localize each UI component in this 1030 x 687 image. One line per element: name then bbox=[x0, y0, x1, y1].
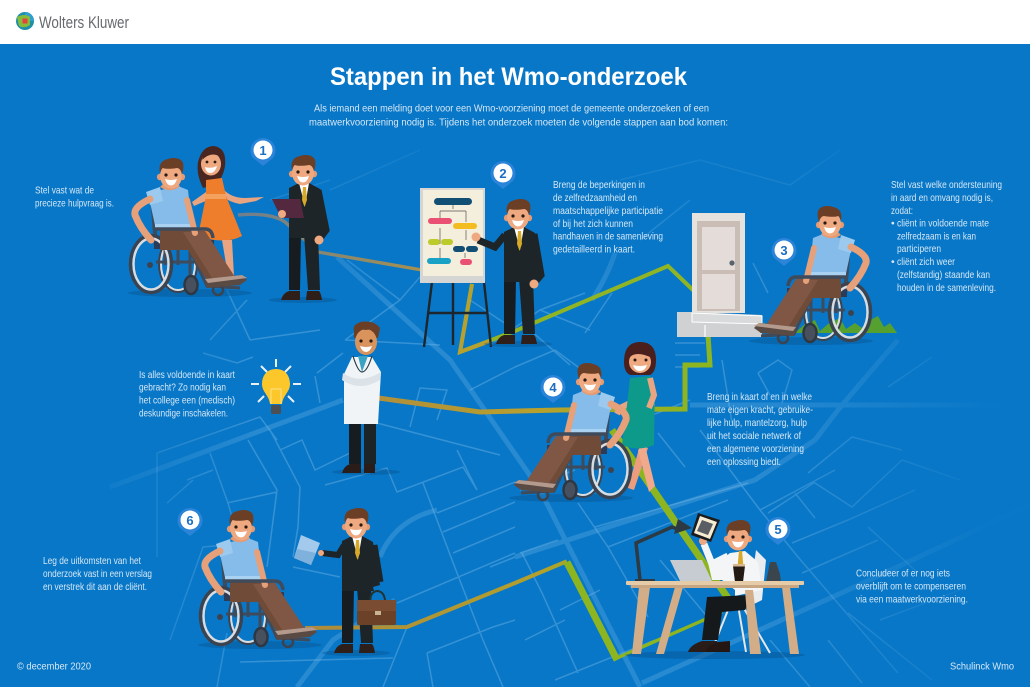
step 4 text bbox=[707, 392, 813, 468]
figure: woman in green dress bbox=[617, 342, 656, 492]
desk lamp bbox=[636, 527, 680, 580]
pin: step 1 bbox=[251, 138, 276, 166]
pin: step 5 bbox=[766, 517, 790, 545]
flipchart on easel bbox=[420, 188, 491, 347]
pin: step 6 bbox=[178, 508, 203, 536]
intro text bbox=[309, 104, 728, 128]
route line: gold section by easel bbox=[460, 284, 490, 352]
step 6 text bbox=[43, 556, 152, 593]
figure: man in wheelchair, step 1 bbox=[128, 158, 252, 297]
step 3 text: • bbox=[891, 218, 895, 230]
step 3 text: • bbox=[891, 257, 895, 268]
expert text bbox=[139, 370, 235, 420]
step 6 text: Leg de uitkomsten van het bbox=[43, 556, 141, 567]
figure: man in wheelchair, step 4 bbox=[509, 363, 633, 502]
figure: person at desk, step 5 bbox=[625, 513, 805, 659]
step 2 text: handhaven in de samenleving bbox=[553, 232, 663, 242]
step 4 text: mate eigen kracht, gebruike- bbox=[707, 405, 813, 416]
footer: date: © december 2020 bbox=[17, 662, 91, 672]
tablet bbox=[691, 513, 720, 542]
pin: step 3: 3 bbox=[780, 243, 788, 258]
pin: step 2 bbox=[490, 161, 516, 189]
briefcase bbox=[357, 591, 396, 625]
step 3 text: in aard en omvang nodig is, bbox=[891, 193, 993, 204]
easel legs bbox=[424, 282, 491, 347]
title: Stappen in het Wmo-onderzoek bbox=[330, 63, 687, 91]
route line: step 4 to desk bbox=[612, 430, 732, 604]
pin: step 2: 2 bbox=[499, 166, 507, 181]
step 3 text: zelfredzaam is en kan bbox=[897, 232, 976, 242]
desk phone bbox=[766, 562, 781, 582]
figure: consultant with report and briefcase bbox=[294, 508, 396, 656]
figure: man in wheelchair, step 3 bbox=[749, 206, 873, 345]
expert text: het college een (medisch) bbox=[139, 396, 235, 406]
route line: thick green corner bbox=[567, 562, 617, 660]
expert text: Is alles voldoende in kaart bbox=[139, 370, 235, 381]
step 4 text: lijke hulp, mantelzorg, hulp bbox=[707, 418, 807, 429]
pin: step 4: 4 bbox=[549, 380, 557, 395]
header bar bbox=[0, 0, 1030, 44]
street map background bbox=[110, 150, 1030, 687]
route line: desk to corner bbox=[617, 612, 722, 658]
trousers bbox=[702, 595, 752, 640]
coffee cup bbox=[733, 566, 745, 582]
chair bbox=[712, 600, 770, 653]
step 3 text bbox=[891, 180, 1002, 294]
step 2 text: of bij het zich kunnen bbox=[553, 219, 633, 230]
step 5 text: Concludeer of er nog iets bbox=[856, 568, 950, 580]
figure: consultant pointing at flipchart bbox=[472, 199, 552, 347]
pin: step 4 bbox=[540, 375, 566, 403]
figure: man in wheelchair, step 6 bbox=[198, 510, 322, 649]
step 5 text: overblijft om te compenseren bbox=[856, 582, 966, 592]
logo: Wolters Kluwer bbox=[16, 12, 129, 32]
pin: step 1: 1 bbox=[259, 143, 267, 158]
pin: step 5: 5 bbox=[774, 522, 782, 537]
door with steps bbox=[677, 213, 762, 337]
expert text: gebracht? Zo nodig kan bbox=[139, 382, 226, 394]
pin: step 3 bbox=[772, 238, 796, 266]
pin: step 6: 6 bbox=[186, 513, 194, 528]
logo: Wolters Kluwer: Wolters Kluwer bbox=[39, 13, 129, 32]
step 4 text: een algemene voorziening bbox=[707, 444, 804, 455]
route line: step 1 to 2 bbox=[238, 214, 422, 270]
step 1 text: Stel vast wat de bbox=[35, 186, 94, 196]
step 2 text: maatschappelijke participatie bbox=[553, 206, 663, 217]
expert text: deskundige inschakelen. bbox=[139, 408, 228, 420]
step 1 text: precieze hulpvraag is. bbox=[35, 198, 114, 210]
intro text: Als iemand een melding doet voor een Wmo-voorziening moet de gemeente onderzoeken of een bbox=[314, 104, 709, 114]
step 3 text: Stel vast welke ondersteuning bbox=[891, 180, 1002, 191]
step 3 text: (zelfstandig) staande kan bbox=[897, 270, 990, 281]
step 3 text: participeren bbox=[897, 244, 941, 255]
step 3 text: cliënt in voldoende mate bbox=[897, 218, 989, 230]
route line: door to step 4 and doctor bbox=[378, 335, 710, 412]
step 3 text: zodat: bbox=[891, 206, 913, 217]
step 5 text bbox=[856, 568, 968, 606]
figure: consultant with clipboard bbox=[269, 155, 337, 303]
footer: source: Schulinck Wmo bbox=[950, 662, 1014, 672]
step 3 text: houden in de samenleving. bbox=[897, 283, 996, 294]
report bbox=[294, 535, 320, 565]
step 3 text: cliënt zich weer bbox=[897, 257, 955, 268]
step 6 text: en verstrek dit aan de cliënt. bbox=[43, 582, 147, 593]
route line: corner to step 6 bbox=[305, 562, 617, 660]
laptop bbox=[670, 560, 712, 581]
floor shadow bbox=[625, 651, 805, 659]
step 2 text: de zelfredzaamheid en bbox=[553, 193, 637, 204]
step 1 text bbox=[35, 186, 114, 210]
step 4 text: Breng in kaart of en in welke bbox=[707, 392, 812, 403]
figure: doctor bbox=[332, 322, 400, 475]
figure: woman in orange dress bbox=[192, 146, 264, 276]
step 4 text: een oplossing biedt. bbox=[707, 457, 781, 468]
desk bbox=[626, 581, 804, 654]
step 6 text: onderzoek vast in een verslag bbox=[43, 569, 152, 580]
flowchart bbox=[427, 198, 478, 265]
intro text: maatwerkvoorziening nodig is. Tijdens het onderzoek moeten de volgende stappen aan bod komen: bbox=[309, 118, 728, 128]
step 5 text: via een maatwerkvoorziening. bbox=[856, 594, 968, 606]
step 2 text: gedetailleerd in kaart. bbox=[553, 244, 635, 256]
icon: light bulb bbox=[251, 359, 301, 414]
man at desk body bbox=[704, 545, 762, 596]
step 2 text bbox=[553, 180, 663, 256]
grass bbox=[760, 316, 897, 333]
step 4 text: uit het sociale netwerk of bbox=[707, 431, 801, 442]
route line: step 2 to door bbox=[460, 266, 695, 352]
step 2 text: Breng de beperkingen in bbox=[553, 180, 645, 191]
